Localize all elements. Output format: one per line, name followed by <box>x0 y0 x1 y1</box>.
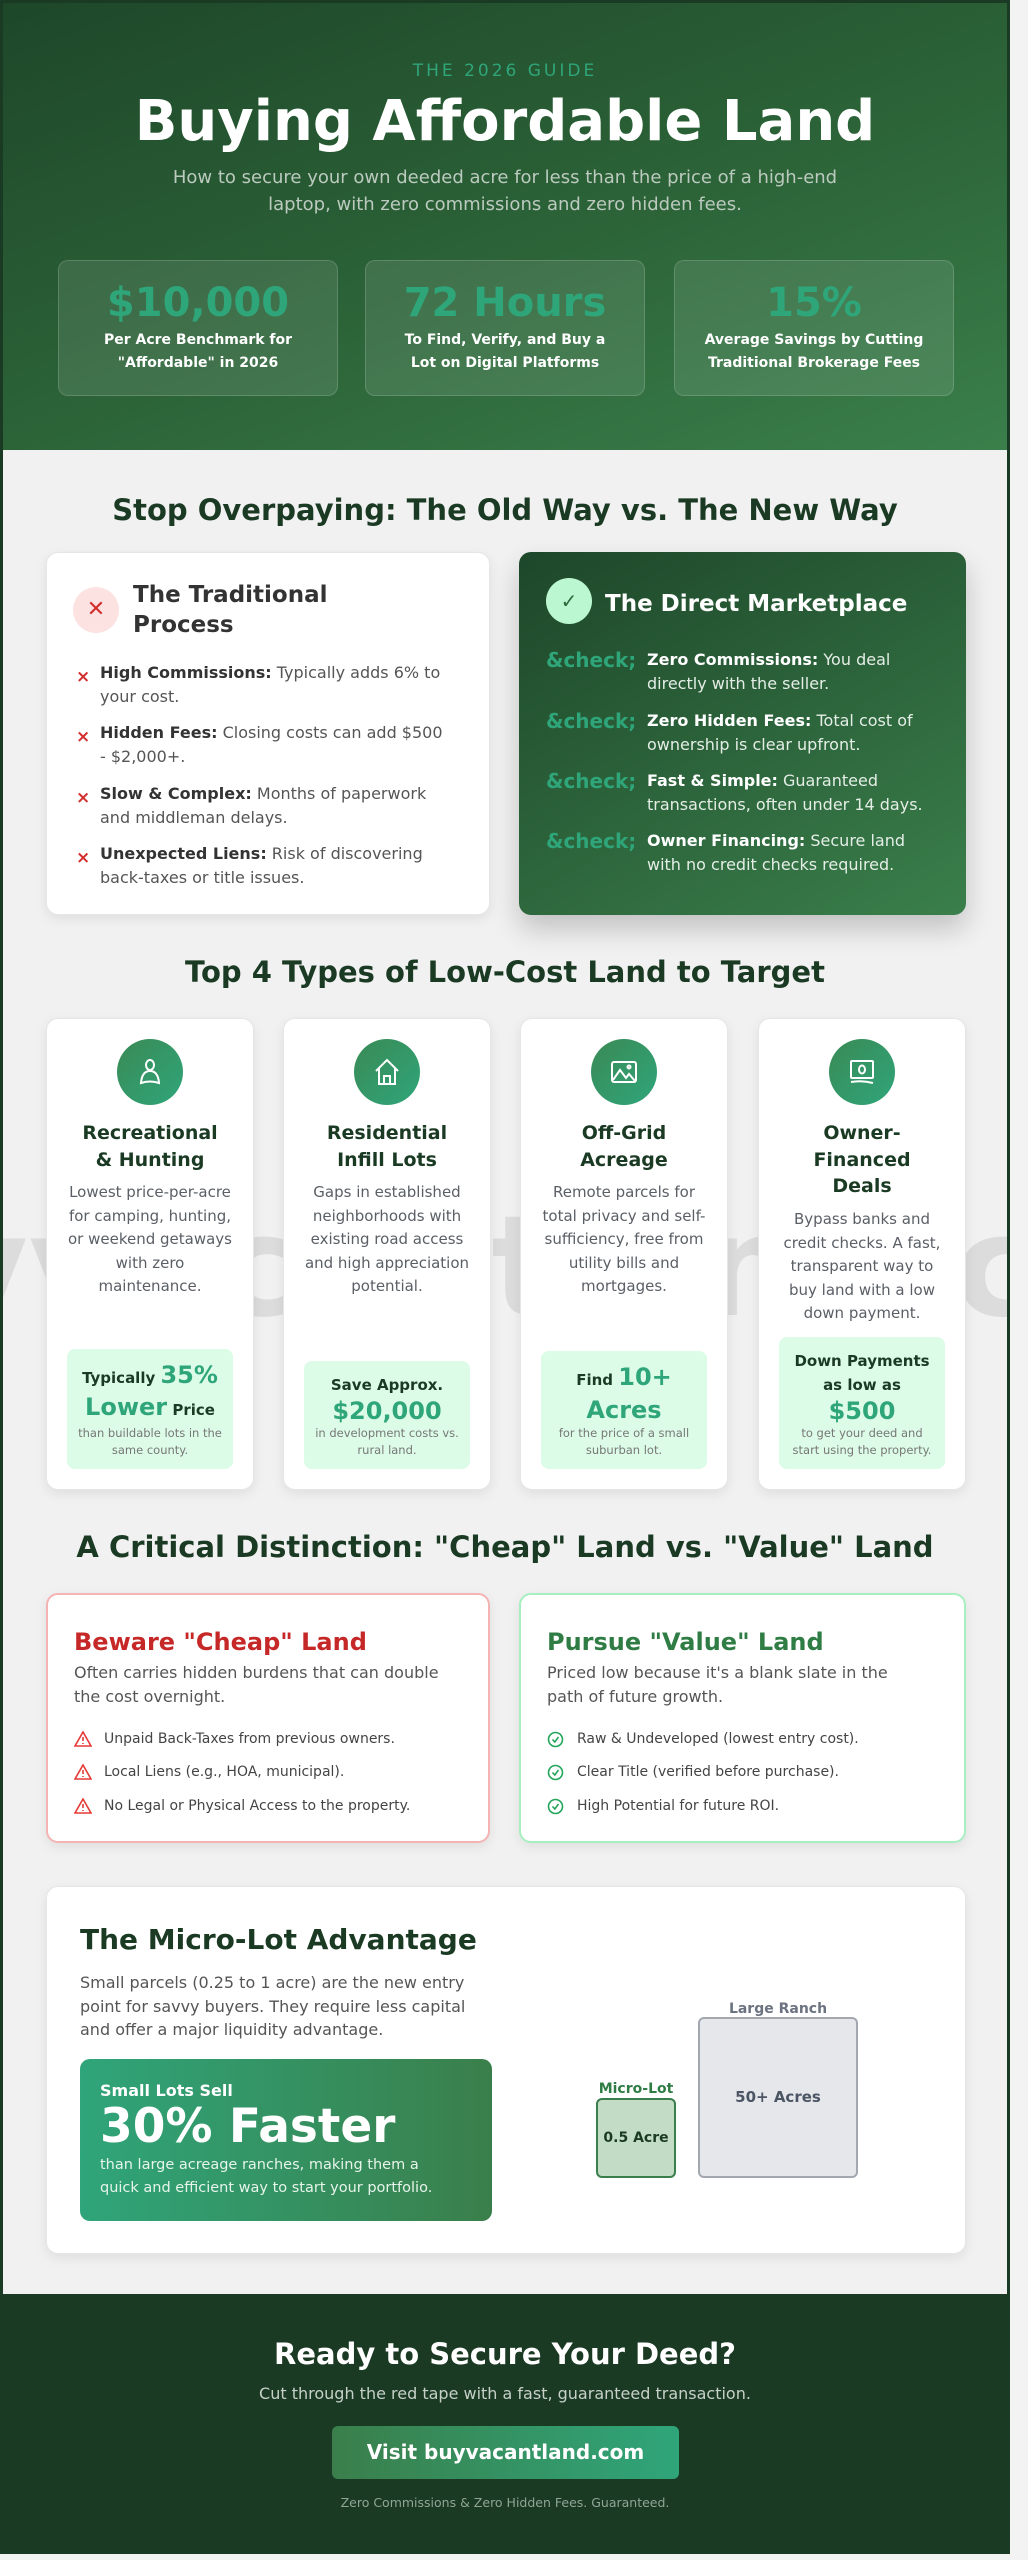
card: off-grid acreage: Acreage <box>580 1148 668 1170</box>
icon: money <box>829 1039 895 1105</box>
card: recreational & hunting: & Hunting <box>96 1148 204 1170</box>
card: owner-financed deals: Deals <box>832 1175 892 1197</box>
stat: 72 hours <box>365 260 645 396</box>
bar: micro-lot: 0.5 Acre <box>603 2130 669 2146</box>
icon: check circle <box>546 578 592 624</box>
list: traditional issues: × <box>76 788 90 808</box>
stat box: to get your deed and start using the property. <box>793 1426 931 1457</box>
heading: old way vs new way: Stop Overpaying: The Old Way vs. The New Way <box>112 493 898 527</box>
list: direct benefits: Owner Financing: Secure land with no credit checks required. <box>647 831 905 874</box>
stat box <box>67 1349 233 1469</box>
list: direct benefits: &check; <box>546 709 636 733</box>
stat box: Down Payments <box>794 1352 930 1370</box>
stat box: $500 <box>829 1397 895 1425</box>
label: large ranch: Large Ranch <box>729 2001 827 2017</box>
callout: 30% faster: Small Lots Sell <box>100 2081 233 2100</box>
stat box: $20,000 <box>332 1397 442 1425</box>
stat: 72 hours: Lot on Digital Platforms <box>411 355 599 371</box>
card: owner-financed deals: Owner- <box>823 1122 901 1144</box>
footer title: Ready to Secure Your Deed? <box>274 2337 736 2371</box>
panel title: The Micro-Lot Advantage <box>80 1923 477 1956</box>
stat: 15%: Traditional Brokerage Fees <box>708 355 920 371</box>
stat box: Lower Price <box>85 1393 215 1421</box>
callout: 30% faster: than large acreage ranches, making them a quick and efficient way to start your portfolio. <box>100 2157 432 2196</box>
list: traditional issues: Slow & Complex: Months of paperwork and middleman delays. <box>100 784 426 827</box>
panel title <box>133 582 328 638</box>
title: Buying Affordable Land <box>135 89 875 154</box>
subtitle: How to secure your own deeded acre for less than the price of a high-end laptop, with zero commissions and zero hidden fees. <box>173 167 837 215</box>
card: owner-financed deals: Financed <box>813 1148 911 1170</box>
panel: beware cheap land: Often carries hidden burdens that can double the cost overnight. <box>74 1663 439 1706</box>
chart: lot size comparison <box>596 2001 858 2178</box>
card: recreational & hunting: Recreational <box>82 1122 218 1144</box>
list: direct benefits: Fast & Simple: Guaranteed transactions, often under 14 days. <box>647 771 923 814</box>
panel title: Process <box>133 612 234 638</box>
stat: 15% <box>674 260 954 396</box>
list: direct benefits: Zero Commissions: You deal directly with the seller. <box>647 650 890 693</box>
panel: micro-lot advantage <box>46 1886 966 2254</box>
stat: 72 hours: To Find, Verify, and Buy a <box>405 332 605 348</box>
stat: 15%: 15% <box>766 280 862 326</box>
list: direct benefits: &check; <box>546 829 636 853</box>
panel: pursue value land: Priced low because it's a blank slate in the path of future growth. <box>547 1663 888 1706</box>
button <box>332 2426 679 2479</box>
list: direct benefits: &check; <box>546 769 636 793</box>
list: warnings: Local Liens (e.g., HOA, municipal). <box>104 1764 344 1780</box>
heading: top 4 types: Top 4 Types of Low-Cost Land to Target <box>185 955 825 989</box>
card: off-grid acreage <box>520 1018 728 1490</box>
hero header <box>3 3 1007 450</box>
panel title: The Direct Marketplace <box>605 591 907 617</box>
stat box: in development costs vs. rural land. <box>315 1426 459 1457</box>
card: recreational & hunting: Lowest price-per-acre for camping, hunting, or weekend getaways with zero maintenance. <box>68 1183 232 1295</box>
card: owner-financed deals <box>758 1018 966 1490</box>
icon: red x circle: ✕ <box>87 597 105 622</box>
stat box: Acres <box>586 1396 662 1424</box>
list: traditional issues <box>76 663 443 887</box>
card: residential infill <box>283 1018 491 1490</box>
callout: 30% faster: 30% Faster <box>100 2099 395 2154</box>
icon: house <box>354 1039 420 1105</box>
list: traditional issues: × <box>76 667 90 687</box>
footer CTA <box>0 2294 1010 2557</box>
bar: micro-lot <box>596 2098 676 2178</box>
stat box <box>304 1361 470 1469</box>
list: warnings: Unpaid Back-Taxes from previous owners. <box>104 1731 395 1747</box>
callout: 30% faster <box>80 2059 492 2221</box>
card: residential infill: Infill Lots <box>337 1148 437 1170</box>
list: warnings <box>74 1731 410 1814</box>
description: Small parcels (0.25 to 1 acre) are the new entry point for savvy buyers. They require less capital and offer a major liquidity advantage. <box>80 1973 465 2039</box>
stat box <box>779 1337 945 1469</box>
stat box: than buildable lots in the same county. <box>78 1426 222 1457</box>
panel: beware cheap land <box>46 1593 490 1843</box>
stat: $10,000: Per Acre Benchmark for <box>104 332 292 348</box>
list: value points: High Potential for future ROI. <box>577 1798 779 1814</box>
eyebrow: the 2026 guide: THE 2026 GUIDE <box>413 61 597 81</box>
icon: check circle: ✓ <box>561 589 577 613</box>
heading: cheap vs value: A Critical Distinction: "Cheap" Land vs. "Value" Land <box>76 1530 934 1564</box>
bar: large ranch <box>698 2017 858 2178</box>
list: value points: Clear Title (verified before purchase). <box>577 1764 839 1780</box>
panel title: The Traditional <box>133 582 328 608</box>
stat box: Find 10+ <box>576 1363 672 1391</box>
stat: $10,000: "Affordable" in 2026 <box>118 355 278 371</box>
stat: $10,000: $10,000 <box>107 280 289 326</box>
icon: red x circle <box>73 587 119 633</box>
list: value points <box>548 1731 859 1814</box>
footer subtitle: Cut through the red tape with a fast, guaranteed transaction. <box>259 2384 751 2403</box>
stat: 72 hours: 72 Hours <box>404 280 606 326</box>
list: direct benefits: Zero Hidden Fees: Total cost of ownership is clear upfront. <box>647 711 913 754</box>
list: traditional issues: High Commissions: Typically adds 6% to your cost. <box>100 663 440 706</box>
panel: pursue value land: Pursue "Value" Land <box>547 1628 824 1656</box>
label: micro-lot: Micro-Lot <box>599 2081 673 2097</box>
stat: 15%: Average Savings by Cutting <box>705 332 923 348</box>
card: off-grid acreage: Off-Grid <box>582 1122 666 1144</box>
panel: beware cheap land: Beware "Cheap" Land <box>74 1628 367 1656</box>
card: owner-financed deals: Bypass banks and credit checks. A fast, transparent way to buy land with a low down payment. <box>784 1210 940 1322</box>
stat box: for the price of a small suburban lot. <box>559 1426 689 1457</box>
list: value points: Raw & Undeveloped (lowest entry cost). <box>577 1731 859 1747</box>
panel: direct marketplace <box>519 552 966 915</box>
stat box: Save Approx. <box>331 1376 443 1394</box>
list: warnings: No Legal or Physical Access to the property. <box>104 1798 410 1814</box>
button: Visit buyvacantland.com <box>367 2440 644 2464</box>
panel: pursue value land <box>519 1593 966 1843</box>
list: traditional issues: Hidden Fees: Closing costs can add $500 - $2,000+. <box>100 723 443 766</box>
stat box: as low as <box>823 1376 901 1394</box>
list: traditional issues: × <box>76 848 90 868</box>
icon: person <box>117 1039 183 1105</box>
list: direct benefits <box>546 648 923 874</box>
stat: $10,000 <box>58 260 338 396</box>
list: traditional issues: Unexpected Liens: Risk of discovering back-taxes or title issues. <box>100 844 423 887</box>
stat box <box>541 1351 707 1469</box>
card: residential infill: Residential <box>327 1122 447 1144</box>
bar: large ranch: 50+ Acres <box>735 2088 821 2106</box>
panel: traditional process <box>46 552 490 915</box>
card: residential infill: Gaps in established neighborhoods with existing road access and high appreciation potential. <box>305 1183 469 1295</box>
list: traditional issues: × <box>76 727 90 747</box>
stat box: Typically 35% <box>82 1361 218 1389</box>
card: off-grid acreage: Remote parcels for total privacy and self-sufficiency, free from utility bills and mortgages. <box>543 1183 705 1295</box>
icon: landscape picture <box>591 1039 657 1105</box>
card: recreational & hunting <box>46 1018 254 1490</box>
footnote: Zero Commissions & Zero Hidden Fees. Guaranteed. <box>341 2495 669 2510</box>
list: direct benefits: &check; <box>546 648 636 672</box>
